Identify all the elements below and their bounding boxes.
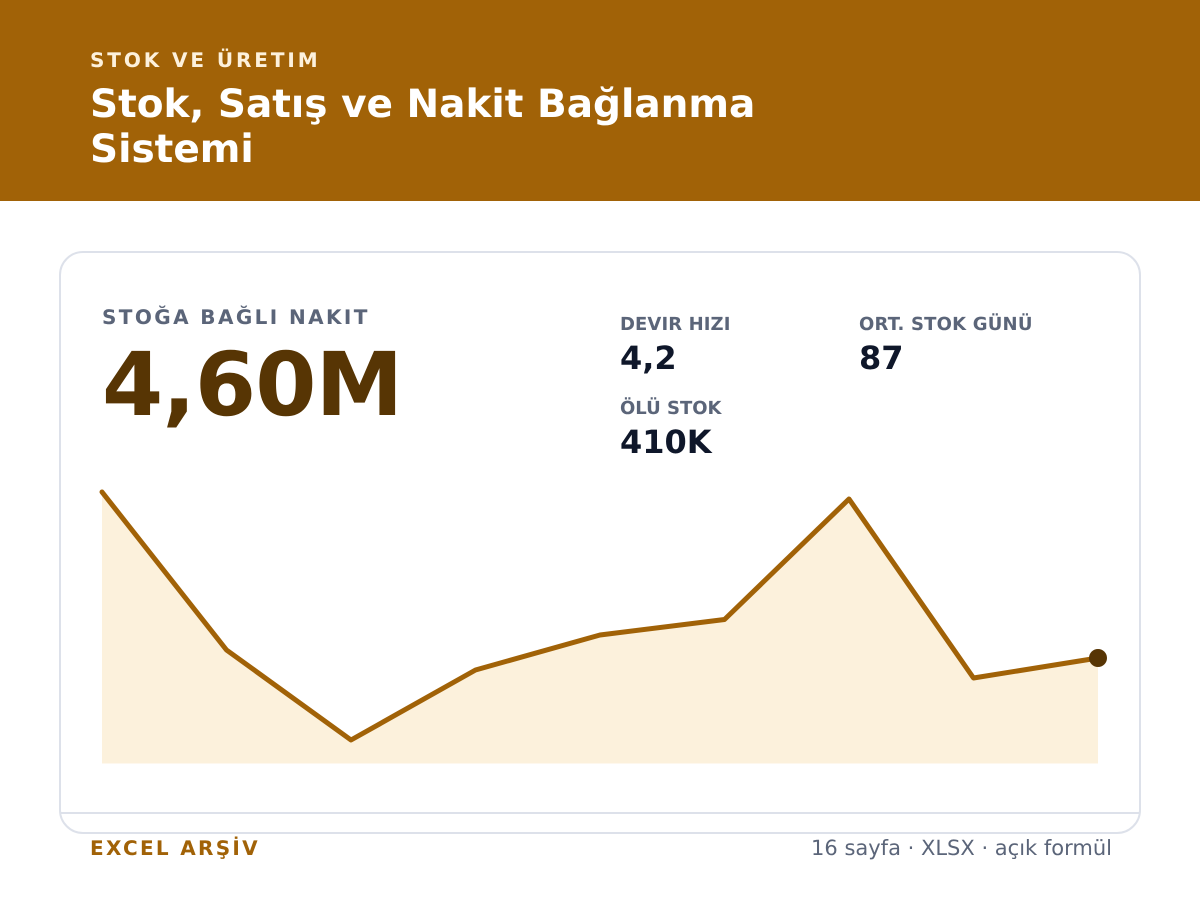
title	[90, 82, 755, 172]
KPI value: 4,60M	[102, 333, 402, 436]
metric: devir hızı	[620, 314, 731, 377]
title: Stok, Satış ve Nakit Bağlanma	[90, 82, 755, 127]
title: Sistemi	[90, 127, 254, 172]
trend line	[102, 492, 1098, 740]
footer bar	[60, 812, 1140, 900]
metric label: ÖLÜ STOK	[620, 398, 722, 419]
metric: ortalama stok günü	[859, 313, 1033, 377]
KPI label: STOĞA BAĞLI NAKIT	[102, 305, 370, 329]
metric label: DEVIR HIZI	[620, 314, 731, 335]
footer meta: 16 sayfa · XLSX · açık formül	[811, 836, 1112, 860]
area fill	[102, 492, 1098, 764]
eyebrow: STOK VE ÜRETIM	[90, 48, 321, 72]
footer brand: EXCEL ARŞİV	[90, 836, 260, 860]
metric value: 410K	[620, 423, 712, 461]
metric: ölü stok	[620, 397, 722, 461]
header band	[0, 0, 1200, 201]
metric value: 87	[859, 339, 904, 377]
end point marker	[1089, 649, 1107, 667]
metric value: 4,2	[620, 339, 677, 377]
metric label: ORT. STOK GÜNÜ	[859, 314, 1033, 335]
panel: main card	[59, 251, 1141, 834]
